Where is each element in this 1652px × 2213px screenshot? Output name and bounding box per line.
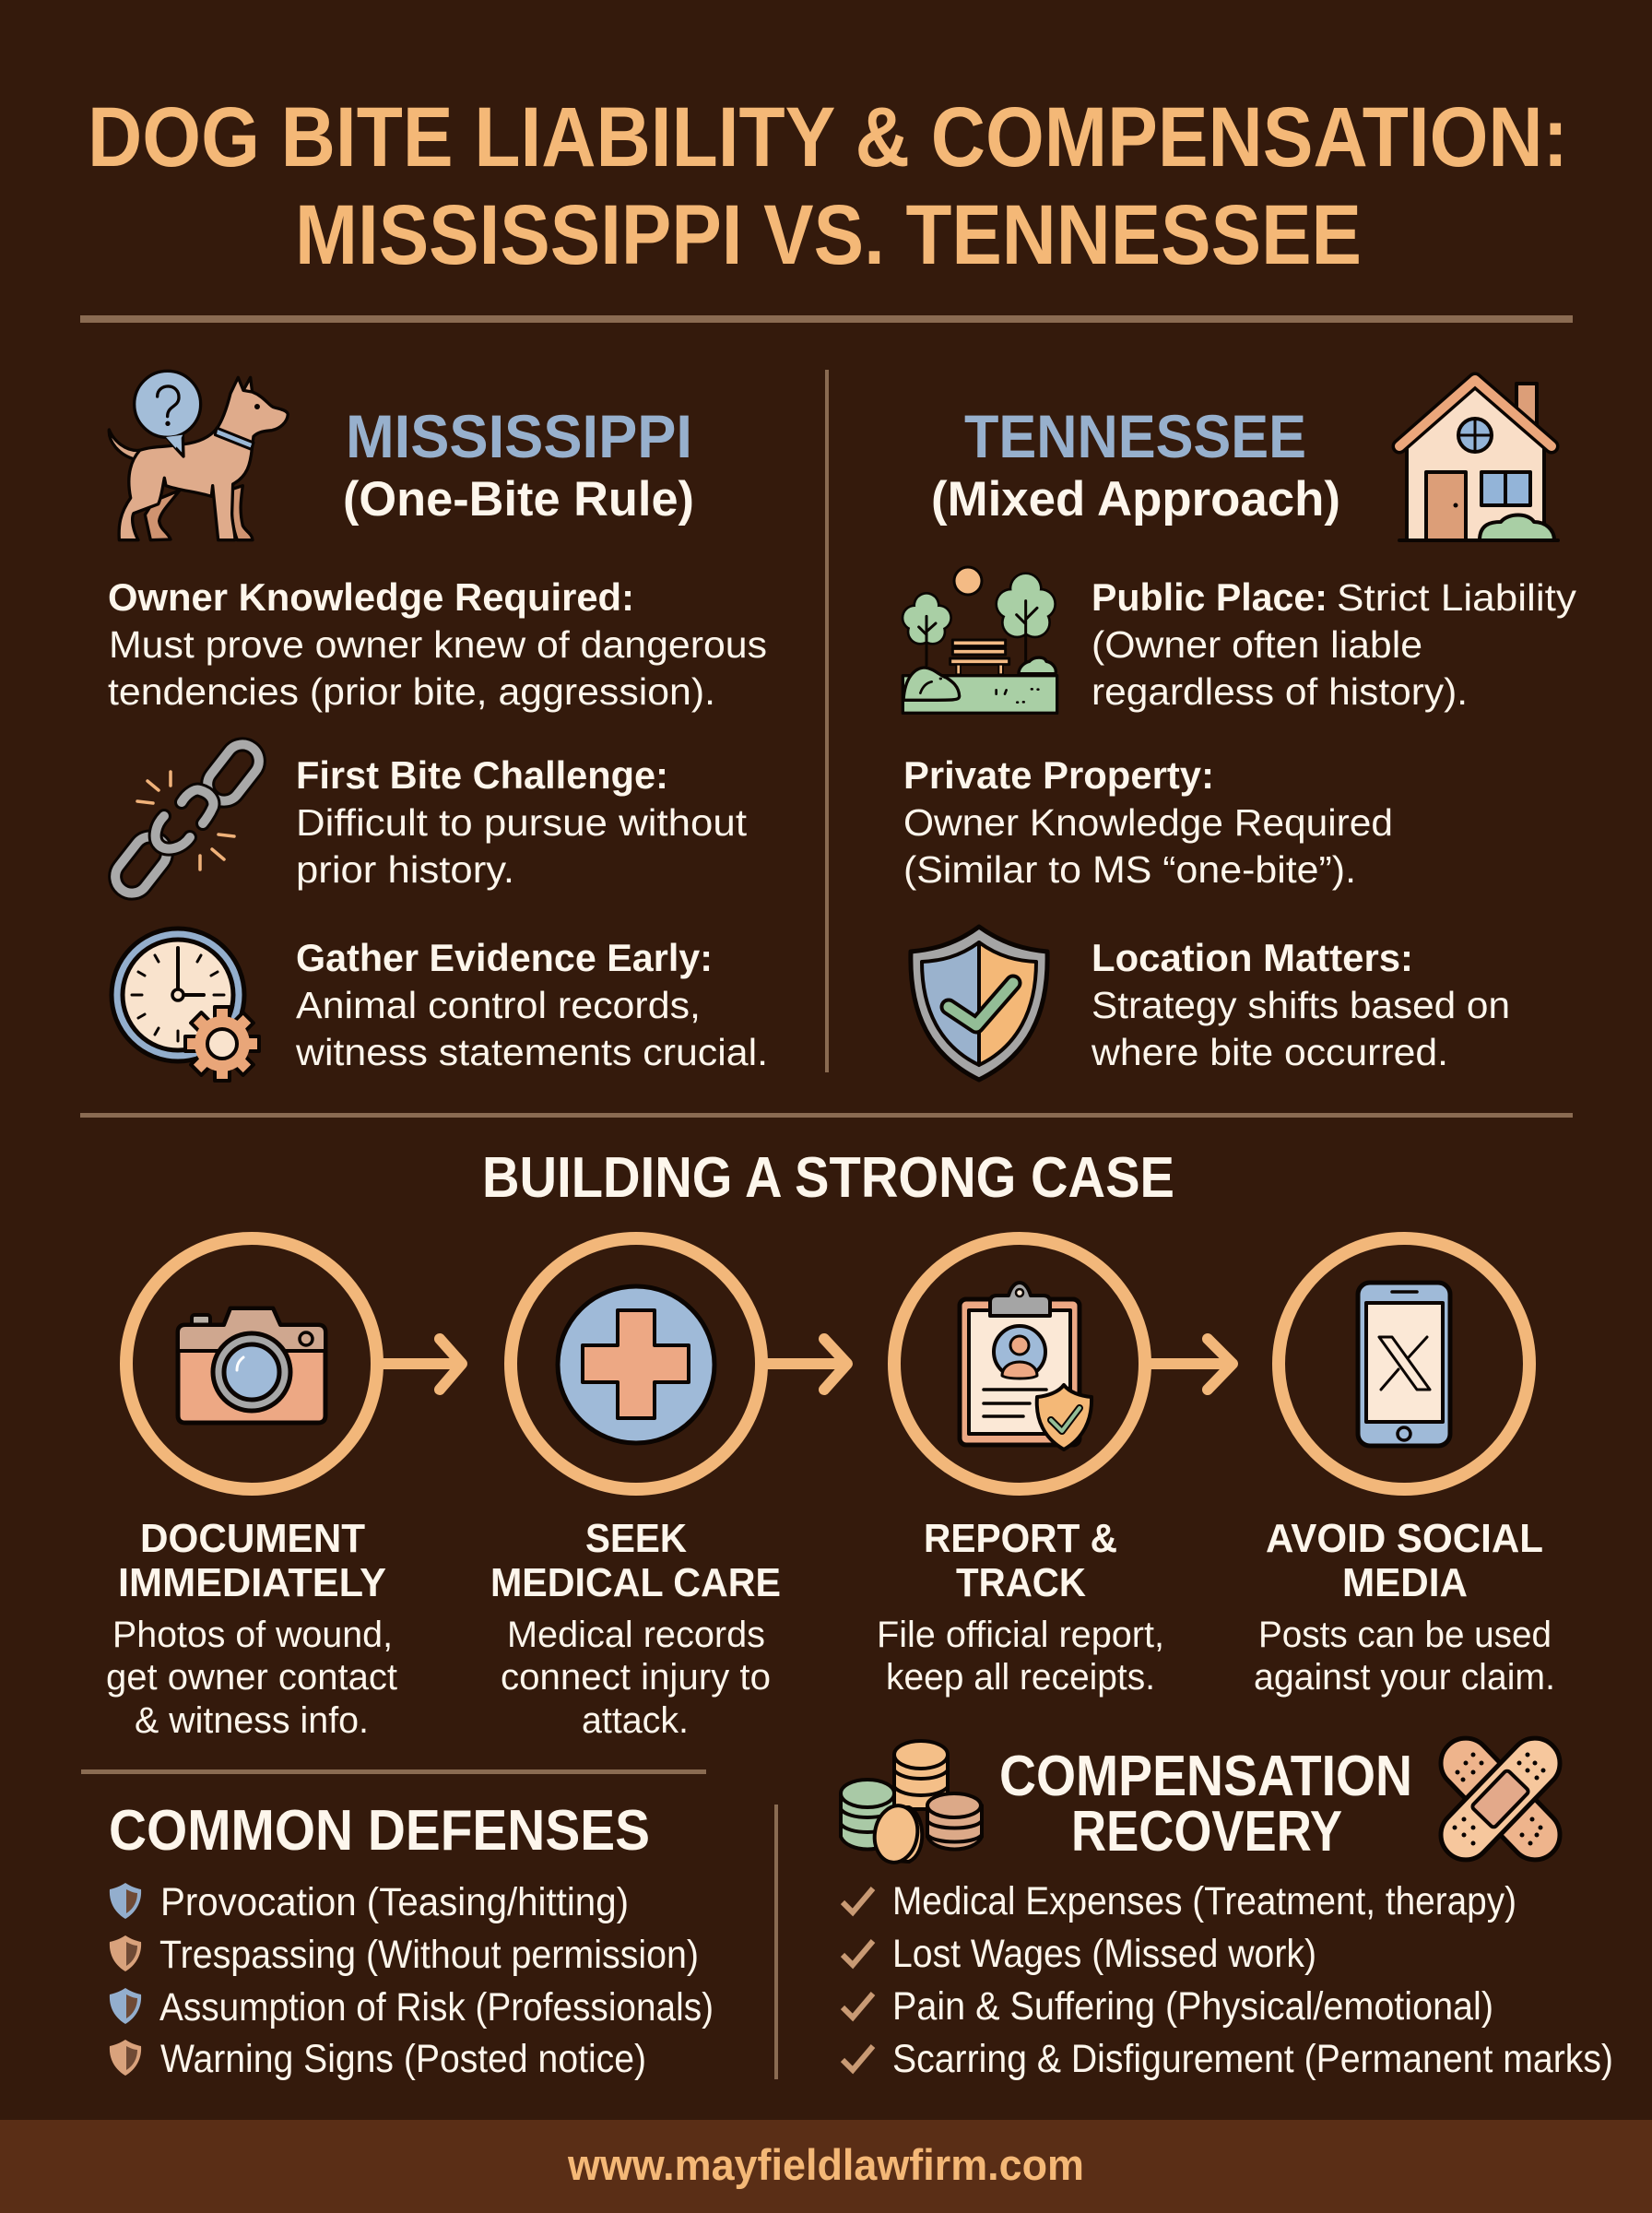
icon: house xyxy=(1399,380,1558,540)
description: seek medical care: attack. xyxy=(582,1700,689,1741)
text: owner knowledge required: tendencies (prior bite, aggression). xyxy=(108,670,715,713)
check list: compensation: Pain & Suffering (Physical/emotional) xyxy=(892,1984,1493,2029)
description: document immediately: Photos of wound, xyxy=(112,1615,393,1655)
label: seek medical care: MEDICAL CARE xyxy=(490,1560,781,1605)
bullet list: defenses xyxy=(110,1880,714,2081)
text: private property: Private Property: xyxy=(903,753,1214,797)
icon: crossed bandages xyxy=(1431,1728,1570,1870)
text: first bite challenge: First Bite Challenge: xyxy=(296,753,668,797)
description: report and track: keep all receipts. xyxy=(886,1657,1155,1698)
text: location matters xyxy=(1091,936,1510,1073)
title: MISSISSIPPI VS. TENNESSEE xyxy=(295,188,1362,282)
bullet list: defenses: Warning Signs (Posted notice) xyxy=(160,2037,646,2081)
icon: broken chain xyxy=(109,738,266,900)
icon: clock with gear xyxy=(112,929,259,1081)
text: first bite challenge xyxy=(296,753,748,891)
text: first bite challenge: prior history. xyxy=(296,848,514,891)
heading: compensation recovery xyxy=(999,1745,1412,1864)
description: seek medical care xyxy=(501,1615,771,1741)
text: public place: Public Place: xyxy=(1092,575,1328,619)
footer band xyxy=(0,2120,1652,2213)
description: avoid social media: Posts can be used xyxy=(1258,1615,1552,1655)
panel: process steps xyxy=(106,1238,1555,1741)
label: document immediately xyxy=(118,1516,386,1605)
label: avoid social media xyxy=(1266,1516,1543,1605)
subheading: One-Bite Rule: (One-Bite Rule) xyxy=(343,472,694,527)
panel: compensation recovery xyxy=(841,1728,1613,2081)
description: seek medical care: Medical records xyxy=(507,1615,765,1655)
icon: park with bench xyxy=(902,567,1057,713)
label: avoid social media: MEDIA xyxy=(1342,1560,1468,1605)
description: seek medical care: connect injury to xyxy=(501,1657,771,1698)
icon: phone with X xyxy=(1279,1238,1529,1489)
check list: compensation xyxy=(843,1879,1613,2081)
panel: Mississippi xyxy=(108,371,768,1081)
panel: common defenses xyxy=(109,1799,714,2081)
icon: camera xyxy=(126,1238,377,1489)
footer band: www.mayfieldlawfirm.com xyxy=(567,2140,1084,2189)
text: first bite challenge: Difficult to pursue without xyxy=(296,801,748,844)
text: public place: Strict Liability xyxy=(1337,576,1577,619)
heading: compensation recovery: COMPENSATION xyxy=(999,1745,1412,1808)
label: avoid social media: AVOID SOCIAL xyxy=(1266,1516,1543,1561)
title xyxy=(88,90,1568,282)
text: owner knowledge required: Must prove owner knew of dangerous xyxy=(109,623,767,666)
subheading: Mixed Approach: (Mixed Approach) xyxy=(931,472,1340,527)
text: private property: Owner Knowledge Required xyxy=(903,801,1393,844)
description: document immediately: & witness info. xyxy=(135,1700,369,1741)
description: document immediately: get owner contact xyxy=(106,1657,397,1698)
heading: Tennessee: TENNESSEE xyxy=(964,402,1306,470)
heading: compensation recovery: RECOVERY xyxy=(1071,1800,1342,1864)
description: avoid social media xyxy=(1254,1615,1555,1698)
icon: coin stacks xyxy=(841,1741,982,1866)
text: gather evidence early xyxy=(295,936,768,1073)
text: location matters: Strategy shifts based on xyxy=(1092,984,1510,1026)
text: private property: (Similar to MS “one-bite”). xyxy=(903,848,1356,891)
text: owner knowledge required xyxy=(108,575,767,713)
text: private property xyxy=(903,753,1393,891)
description: report and track: File official report, xyxy=(877,1615,1164,1655)
panel: Tennessee xyxy=(902,380,1577,1080)
description: avoid social media: against your claim. xyxy=(1254,1657,1555,1698)
text: public place xyxy=(1092,575,1577,713)
step 4: avoid social media xyxy=(1254,1238,1555,1698)
description: report and track xyxy=(877,1615,1164,1698)
step 1: document immediately xyxy=(106,1238,397,1741)
label: seek medical care: SEEK xyxy=(585,1516,687,1561)
text: location matters: Location Matters: xyxy=(1092,936,1413,979)
text: gather evidence early: Animal control records, xyxy=(296,984,701,1026)
label: document immediately: DOCUMENT xyxy=(140,1516,365,1561)
icon: medical cross xyxy=(511,1238,761,1489)
label: report and track: REPORT & xyxy=(924,1516,1117,1561)
bullet list: defenses: Assumption of Risk (Professionals) xyxy=(159,1985,714,2030)
icon: dog with question bubble xyxy=(109,371,288,540)
arrow 1 xyxy=(384,1339,462,1390)
check list: compensation: Medical Expenses (Treatment, therapy) xyxy=(892,1879,1516,1923)
arrow 2 xyxy=(767,1339,847,1390)
description: document immediately xyxy=(106,1615,397,1741)
text: gather evidence early: Gather Evidence Early: xyxy=(296,936,713,979)
label: seek medical care xyxy=(490,1516,781,1605)
text: location matters: where bite occurred. xyxy=(1091,1031,1448,1073)
text: public place: (Owner often liable xyxy=(1092,623,1422,666)
icon: split shield with check xyxy=(911,927,1047,1080)
check list: compensation: Lost Wages (Missed work) xyxy=(892,1932,1316,1976)
label: document immediately: IMMEDIATELY xyxy=(118,1560,386,1605)
text: public place: regardless of history). xyxy=(1092,670,1468,713)
icon: clipboard with shield xyxy=(894,1238,1145,1489)
heading: building a strong case: BUILDING A STRONG CASE xyxy=(482,1146,1174,1210)
bullet list: defenses: Provocation (Teasing/hitting) xyxy=(160,1880,629,1924)
step 2: seek medical care xyxy=(490,1238,781,1741)
text: owner knowledge required: Owner Knowledge Required: xyxy=(108,575,634,619)
label: report and track xyxy=(924,1516,1117,1605)
bullet list: defenses: Trespassing (Without permission) xyxy=(159,1933,699,1977)
text: gather evidence early: witness statements crucial. xyxy=(295,1031,768,1073)
label: report and track: TRACK xyxy=(956,1560,1086,1605)
heading: Mississippi: MISSISSIPPI xyxy=(346,402,692,470)
heading: common defenses: COMMON DEFENSES xyxy=(109,1799,650,1863)
arrow 3 xyxy=(1151,1339,1233,1390)
step 3: report and track xyxy=(877,1238,1164,1698)
